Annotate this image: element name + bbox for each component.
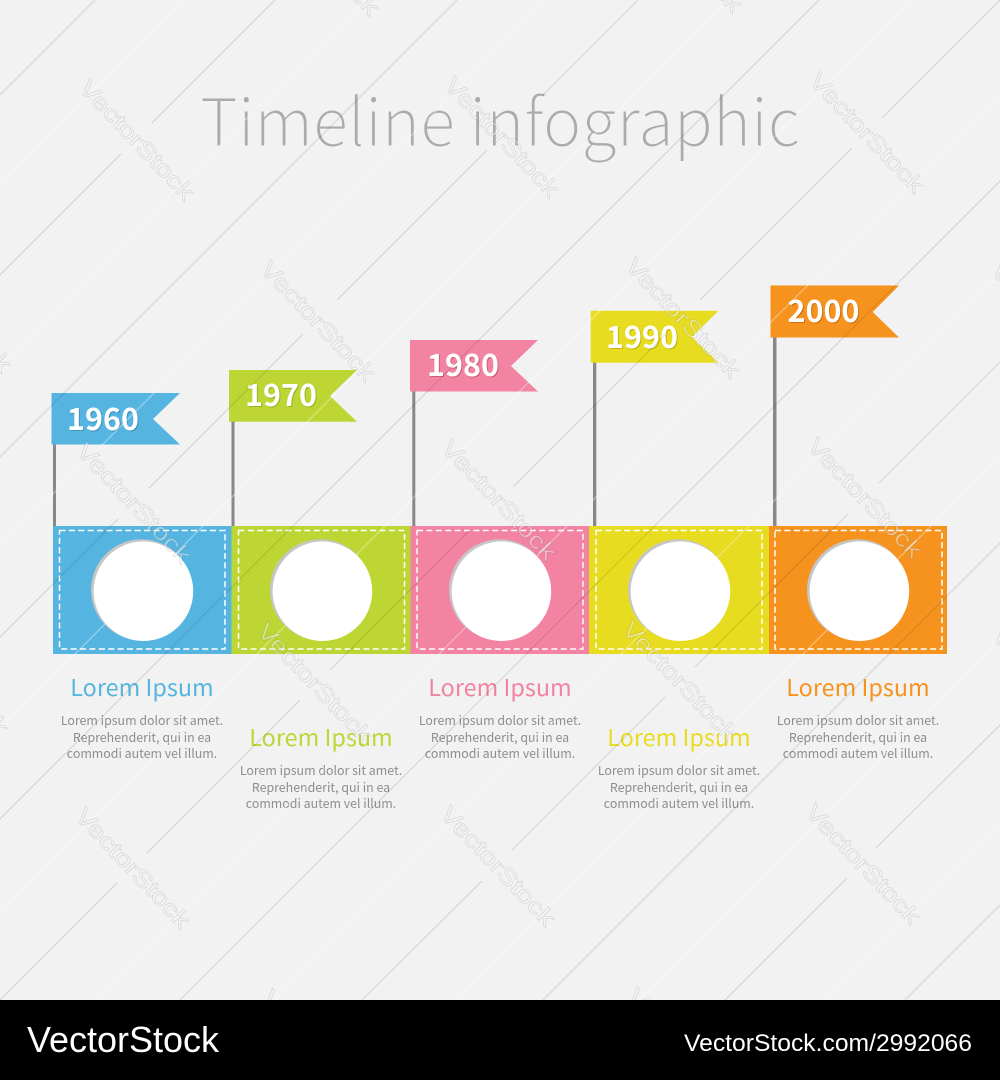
watermark pattern: VectorStock [74, 75, 200, 206]
watermark pattern: VectorStock [802, 433, 928, 564]
flag: 1980 [410, 340, 538, 392]
colour block: 1970 [232, 526, 410, 654]
text block: 1970: Lorem Ipsum [249, 719, 393, 753]
colour block: 1960 [53, 526, 232, 654]
text block: 1970: Lorem ipsum dolor sit amet. [240, 761, 402, 779]
timeline step: 2000 [769, 286, 947, 762]
text block: 1990 [598, 719, 760, 812]
watermark pattern: VectorStock [804, 68, 930, 199]
flag: 1970: 1970 [246, 372, 318, 416]
flag pole: 1980 [412, 388, 415, 528]
flag: 1960 [52, 393, 180, 444]
flag pole: 1960 [53, 440, 56, 528]
colour block: 1980 [410, 526, 589, 654]
flag: 2000: 2000 [788, 288, 860, 332]
text block: 1990: Lorem Ipsum [607, 719, 751, 753]
text block: 2000: commodi autem vel illum. [783, 744, 933, 762]
text block: 1960: Reprehenderit, qui in ea [73, 728, 211, 746]
watermark pattern: VectorStock [71, 438, 197, 569]
watermark pattern: VectorStock [255, 256, 381, 387]
text block: 1960: Lorem Ipsum [70, 669, 214, 703]
timeline step: 1980 [410, 340, 589, 762]
flag: 1970 [229, 370, 357, 422]
timeline step: 1960 [52, 393, 232, 762]
watermark pattern: VectorStock [620, 253, 746, 384]
watermark pattern: VectorStock [252, 618, 378, 749]
text block: 1970 [240, 719, 402, 812]
flag: 1970: 1970 [245, 371, 317, 415]
watermark pattern: VectorStock [800, 799, 926, 930]
flag: 1990: 1990 [607, 314, 679, 358]
colour block: 2000 [769, 526, 947, 654]
flag: 1990: 1990 [606, 313, 678, 357]
title: Timeline infographic [200, 70, 800, 166]
flag pole: 1970 [232, 418, 234, 528]
flag: 1960: 1960 [67, 395, 139, 439]
footer bar [0, 1000, 1000, 1080]
flag: 2000: 2000 [788, 287, 860, 331]
watermark pattern: VectorStock [617, 616, 743, 747]
flag: 1990 [591, 311, 718, 363]
flag pole: 2000 [773, 334, 776, 528]
text block: 1960: Lorem ipsum dolor sit amet. [61, 711, 223, 729]
flag: 1980: 1980 [427, 341, 499, 385]
timeline step: 1990 [589, 311, 769, 812]
text block: 1980: Lorem ipsum dolor sit amet. [419, 711, 581, 729]
watermark pattern: VectorStock [439, 72, 565, 203]
text block: 1970: Reprehenderit, qui in ea [252, 778, 390, 796]
text block: 1960 [61, 669, 223, 762]
text block: 2000: Reprehenderit, qui in ea [789, 728, 927, 746]
text block: 1980 [419, 669, 581, 762]
text block: 1990: commodi autem vel illum. [604, 794, 754, 812]
text block: 1980: Reprehenderit, qui in ea [431, 728, 569, 746]
watermark pattern: VectorStock [436, 435, 562, 566]
flag: 2000 [770, 286, 899, 338]
text block: 2000 [777, 669, 939, 762]
watermark pattern: VectorStock [70, 803, 196, 934]
timeline step: 1970 [229, 370, 410, 812]
text block: 1990: Reprehenderit, qui in ea [610, 778, 748, 796]
text block: 2000: Lorem Ipsum [786, 669, 930, 703]
text block: 1990: Lorem ipsum dolor sit amet. [598, 761, 760, 779]
flag: 1960: 1960 [68, 396, 140, 440]
text block: 1970: commodi autem vel illum. [246, 794, 396, 812]
flag pole: 1990 [593, 358, 596, 528]
watermark pattern: VectorStock [435, 801, 561, 932]
footer image id: VectorStock.com/2992066 [684, 1030, 972, 1057]
text block: 2000: Lorem ipsum dolor sit amet. [777, 711, 939, 729]
footer logo text: VectorStock [27, 1019, 220, 1060]
text block: 1980: commodi autem vel illum. [425, 744, 575, 762]
colour block: 1990 [589, 526, 769, 654]
flag: 1980: 1980 [428, 342, 500, 386]
text block: 1960: commodi autem vel illum. [67, 744, 217, 762]
text block: 1980: Lorem Ipsum [428, 669, 572, 703]
